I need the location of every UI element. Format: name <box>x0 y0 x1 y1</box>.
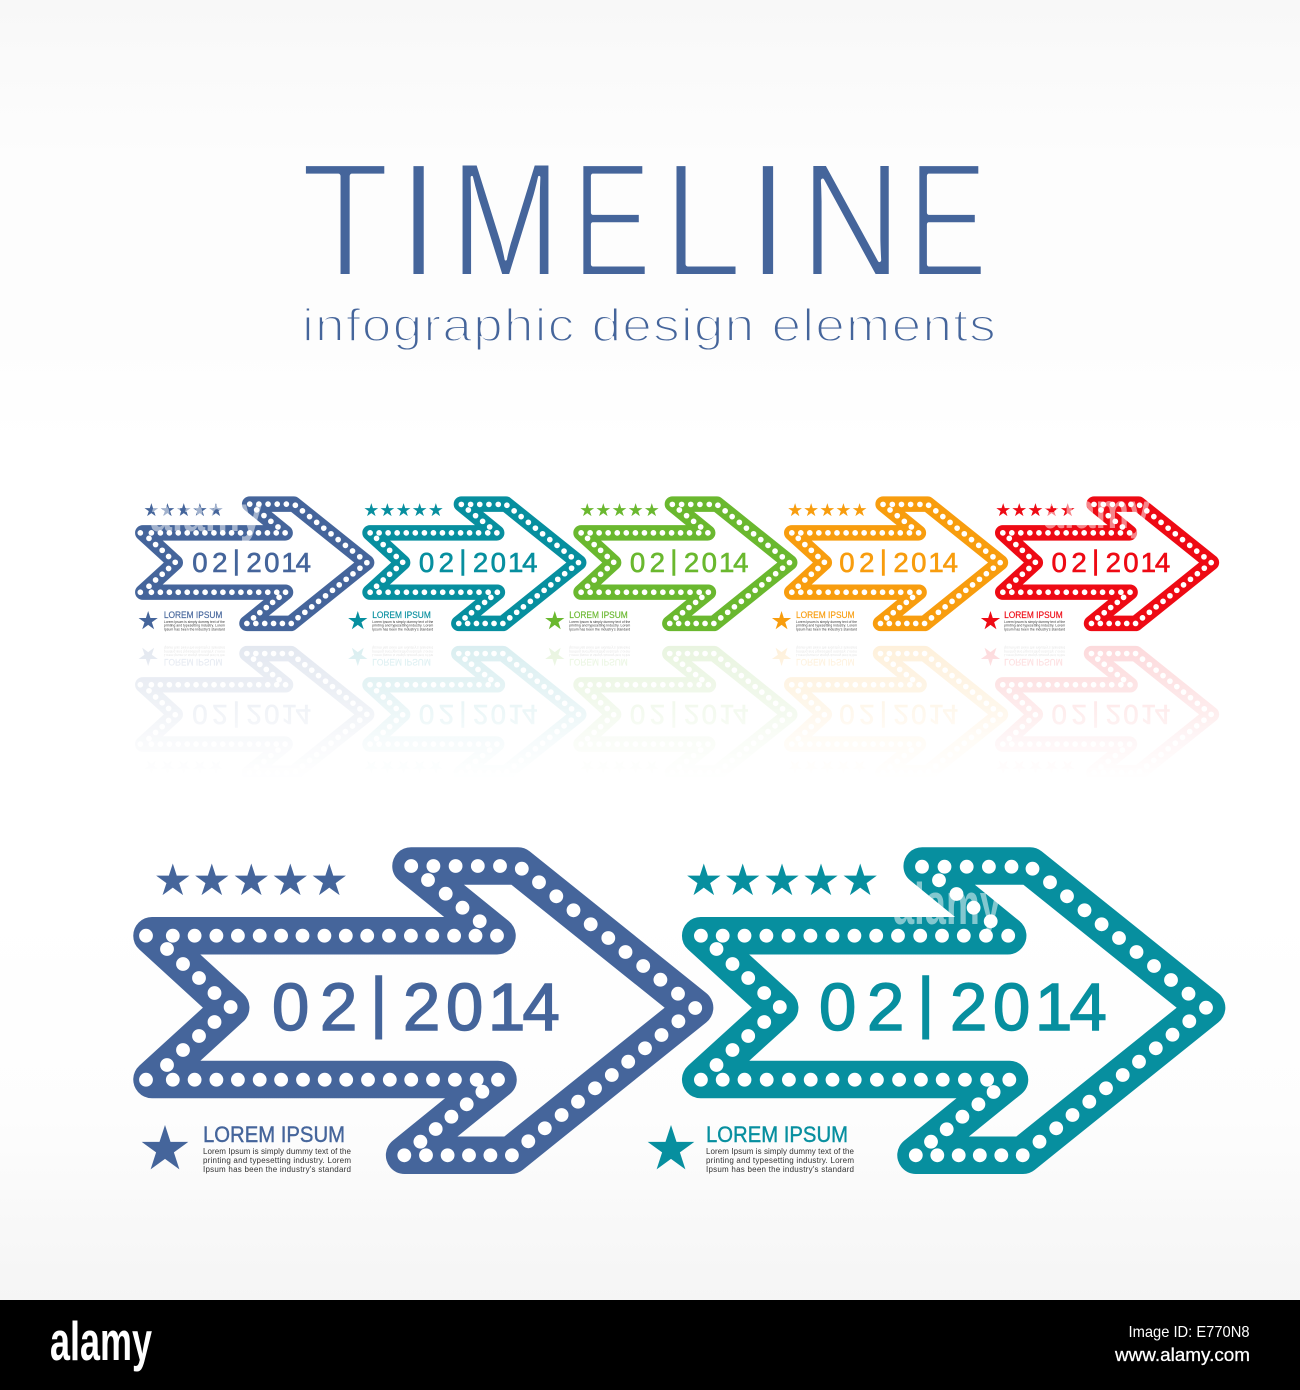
body text: blue: Lorem Ipsum is simply dummy text of the <box>203 1147 352 1156</box>
small arrow: green: printing and typesetting industry. Lorem <box>569 624 630 628</box>
small arrow: green: LOREM IPSUM <box>569 610 628 620</box>
small arrow: teal: Lorem Ipsum is simply dummy text of the <box>372 620 433 624</box>
footer bar <box>0 1300 1300 1390</box>
subtitle: infographic design elements <box>302 299 997 351</box>
small arrow: red: Lorem Ipsum is simply dummy text of the <box>1004 620 1065 624</box>
date: teal: 02|2014 <box>819 964 1107 1045</box>
body text: teal: Lorem Ipsum is simply dummy text of the <box>706 1147 855 1156</box>
small arrow: red: printing and typesetting industry. Lorem <box>1004 624 1065 628</box>
large arrow: teal <box>648 864 1207 1174</box>
small arrow: orange <box>772 503 1000 631</box>
small arrow: blue: LOREM IPSUM <box>164 610 222 620</box>
small arrow: teal: Ipsum has been the industry's standard <box>372 627 433 631</box>
small arrow: teal: printing and typesetting industry. Lorem <box>372 624 434 628</box>
small arrow: orange: Ipsum has been the industry's standard <box>796 627 857 631</box>
body text: teal <box>706 1147 855 1174</box>
footer logo: alamy <box>50 1310 152 1372</box>
title: I <box>745 128 791 312</box>
small arrow: green: 02|2014 <box>630 545 749 578</box>
small arrow: teal: LOREM IPSUM <box>372 610 431 620</box>
title: E <box>908 128 988 312</box>
body text: teal: printing and typesetting industry. Lorem <box>706 1156 854 1165</box>
label: teal: LOREM IPSUM <box>706 1122 848 1147</box>
small arrow: blue: printing and typesetting industry. Lorem <box>164 624 225 628</box>
image id: Image ID: E770N8 <box>1128 1324 1250 1341</box>
small arrow: orange: printing and typesetting industry. Lorem <box>796 624 857 628</box>
title: L <box>662 128 742 312</box>
small arrow: blue: Lorem Ipsum is simply dummy text of the <box>164 620 225 624</box>
small arrow: orange: LOREM IPSUM <box>796 610 855 620</box>
large arrow: blue <box>142 864 695 1174</box>
small arrow: green: Lorem Ipsum is simply dummy text of the <box>569 620 630 624</box>
small arrow: teal <box>348 503 579 631</box>
body text: teal: Ipsum has been the industry's standard <box>706 1165 854 1174</box>
website: www.alamy.com <box>1114 1345 1250 1365</box>
small arrow: green: Ipsum has been the industry's standard <box>569 627 630 631</box>
watermarks: alamy <box>1043 483 1150 539</box>
small arrow: blue <box>139 503 367 631</box>
date: blue: 02|2014 <box>272 964 560 1045</box>
body text: blue <box>203 1147 352 1174</box>
title: M <box>450 130 560 310</box>
small arrow: orange: Lorem Ipsum is simply dummy text of the <box>796 620 857 624</box>
small arrow: blue: 02|2014 <box>192 545 311 578</box>
title: T <box>300 128 390 312</box>
reflection of small arrows <box>135 646 1219 742</box>
small arrow: blue: Ipsum has been the industry's standard <box>164 627 225 631</box>
title: I <box>396 128 441 312</box>
small arrow: red: LOREM IPSUM <box>1004 610 1063 620</box>
small arrow: red <box>981 503 1211 631</box>
body text: blue: Ipsum has been the industry's standard <box>203 1165 351 1174</box>
watermarks: alamy <box>150 486 262 542</box>
small arrow: red: 02|2014 <box>1052 545 1170 578</box>
small arrow: orange: 02|2014 <box>839 545 958 578</box>
small arrow: teal: 02|2014 <box>419 545 538 578</box>
body text: blue: printing and typesetting industry. Lorem <box>203 1156 351 1165</box>
watermarks: alamy <box>893 872 1001 937</box>
title: E <box>572 128 652 312</box>
small arrow: red: Ipsum has been the industry's standard <box>1004 627 1065 631</box>
watermarks <box>150 483 1150 937</box>
label: blue: LOREM IPSUM <box>203 1122 345 1147</box>
title: N <box>800 130 902 311</box>
small arrow: green <box>545 503 790 631</box>
